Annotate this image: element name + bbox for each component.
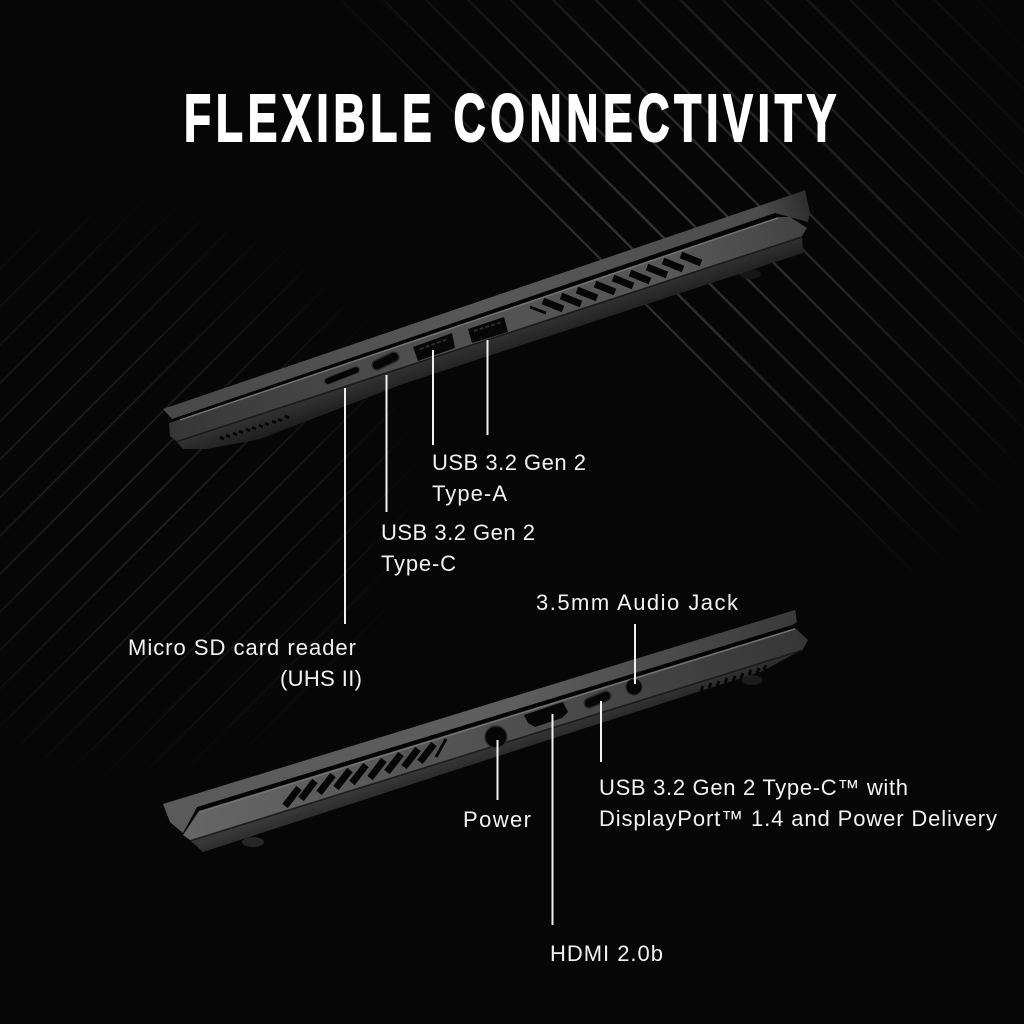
rubber foot [739,269,761,279]
rubber foot [242,837,264,847]
port: power [485,726,507,748]
laptop: left side view [163,190,810,449]
background [0,0,1024,730]
laptop: right side view [163,610,808,852]
vent [530,255,701,313]
label: USB-C: Type-C [381,551,456,576]
speaker grille [220,416,289,439]
port: USB-C [377,357,394,365]
label: USB-A: USB 3.2 Gen 2 [432,450,586,475]
label: Micro SD: Micro SD card reader [128,635,356,660]
lower chassis [176,236,803,449]
label: HDMI: HDMI 2.0b [550,941,663,966]
port: USB-A 1 [413,333,455,361]
speaker grille [701,665,766,691]
label: Micro SD: (UHS II) [280,666,362,691]
leader lines [345,340,635,925]
port: USB-A 2 [468,317,508,343]
gap [170,213,790,424]
title: FLEXIBLE CONNECTIVITY [184,82,836,156]
gap [197,625,797,812]
lid [163,190,810,419]
lower chassis [190,649,803,852]
port: USB-C [589,696,606,703]
label: USB-C DisplayPort: DisplayPort™ 1.4 and Power Delivery [599,806,997,831]
label: audio jack: 3.5mm Audio Jack [536,590,739,615]
side face [183,628,808,840]
label: USB-C: USB 3.2 Gen 2 [381,520,535,545]
label: USB-A: Type-A [432,481,507,506]
label: USB-C DisplayPort: USB 3.2 Gen 2 Type-C™ with [599,775,908,800]
port: HDMI [524,702,568,727]
port: audio jack [626,679,642,695]
lid [163,610,797,833]
label: power: Power [463,807,531,832]
vent [285,739,446,806]
port: micro SD [328,370,356,381]
side face [169,217,807,441]
